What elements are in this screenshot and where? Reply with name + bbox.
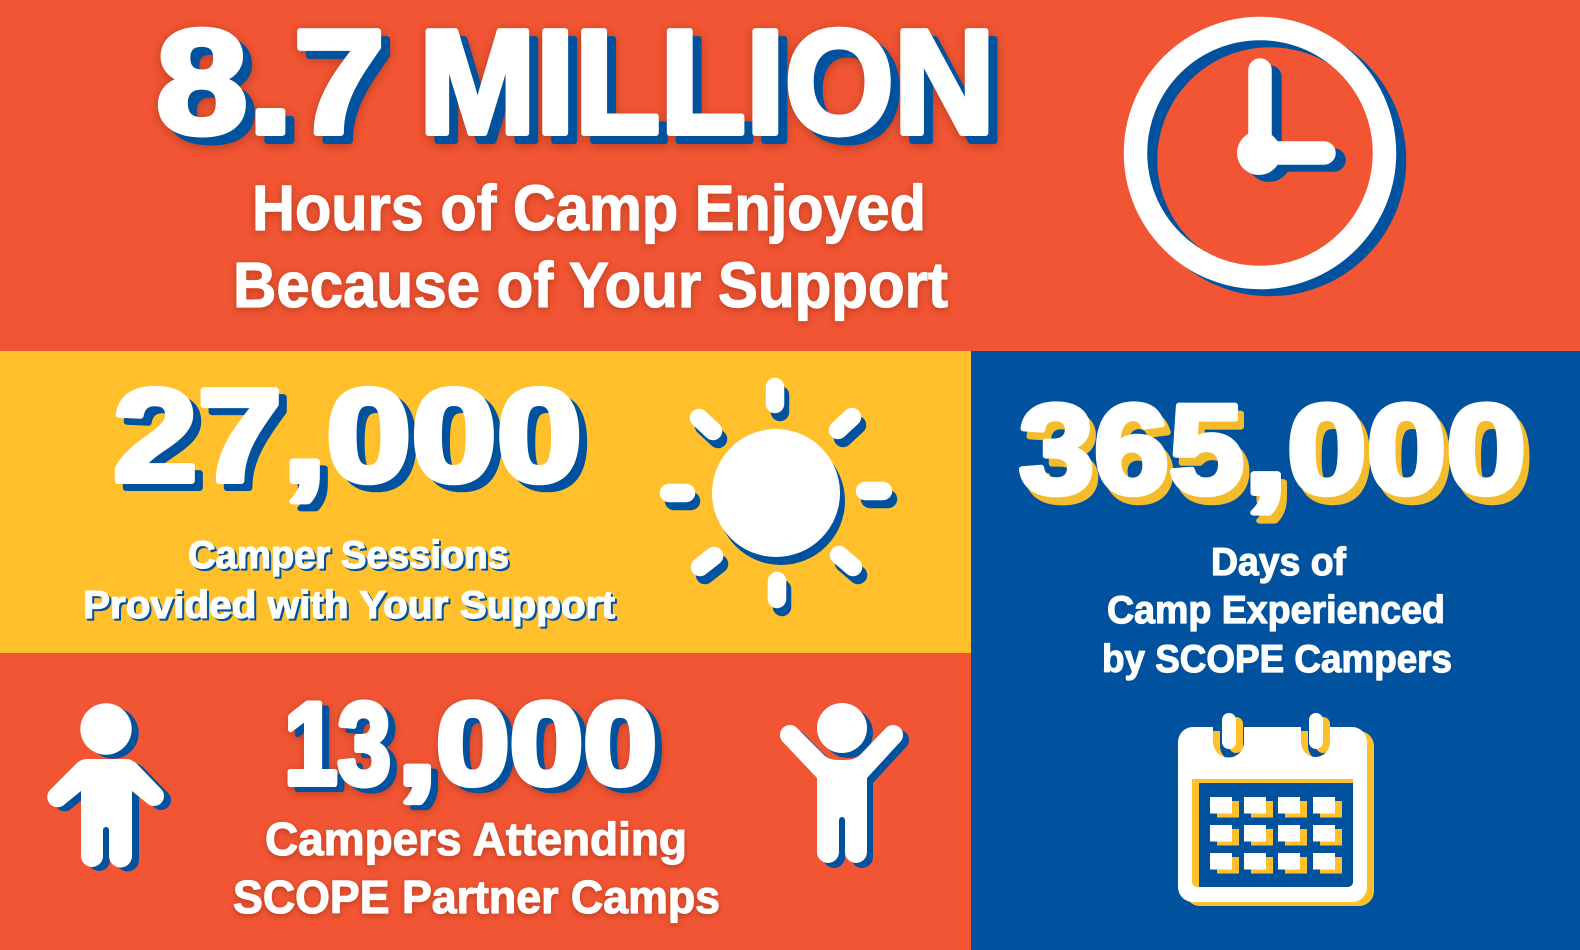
headline: 13,000: 000 [436,678,657,809]
headline: 13,000: , [397,678,437,809]
text: camp experienced: Camp Experienced [1107,589,1445,632]
icon: child with arms raised [780,703,903,863]
panel: hours of camp [0,0,1580,351]
headline: 365,000: 000 [1287,378,1526,520]
headline: 8.7 million: MILLION [419,0,995,165]
icon: child with arms down [47,703,164,868]
icon: clock [1136,28,1384,278]
headline: 365,000: 365 [1019,378,1244,520]
panel: days of camp [971,351,1580,950]
headline: 27,000: , [282,362,327,509]
headline: 27,000: 27 [113,362,282,509]
icon: calendar [1178,713,1367,902]
text: by scope campers: by SCOPE Campers [1102,638,1452,681]
text: because of your support: Because of Your Support [233,249,948,321]
headline: 8.7 million: 8.7 [156,0,385,165]
text: scope partner camps: SCOPE Partner Camps [233,871,720,923]
text: days of: Days of [1211,541,1347,584]
text: campers attending: Campers Attending [265,813,687,865]
text: provided with your support: Provided with Your Support [83,584,615,627]
icon: sun [669,387,883,599]
headline: 13,000: 13 [284,678,391,809]
headline: 365,000: , [1243,378,1288,520]
panel: camper sessions [0,351,971,653]
text: hours of camp enjoyed: Hours of Camp Enjoyed [252,172,926,244]
text: camper sessions: Camper Sessions [188,534,509,577]
panel: campers attending [0,653,971,950]
headline: 27,000: 000 [326,362,582,509]
